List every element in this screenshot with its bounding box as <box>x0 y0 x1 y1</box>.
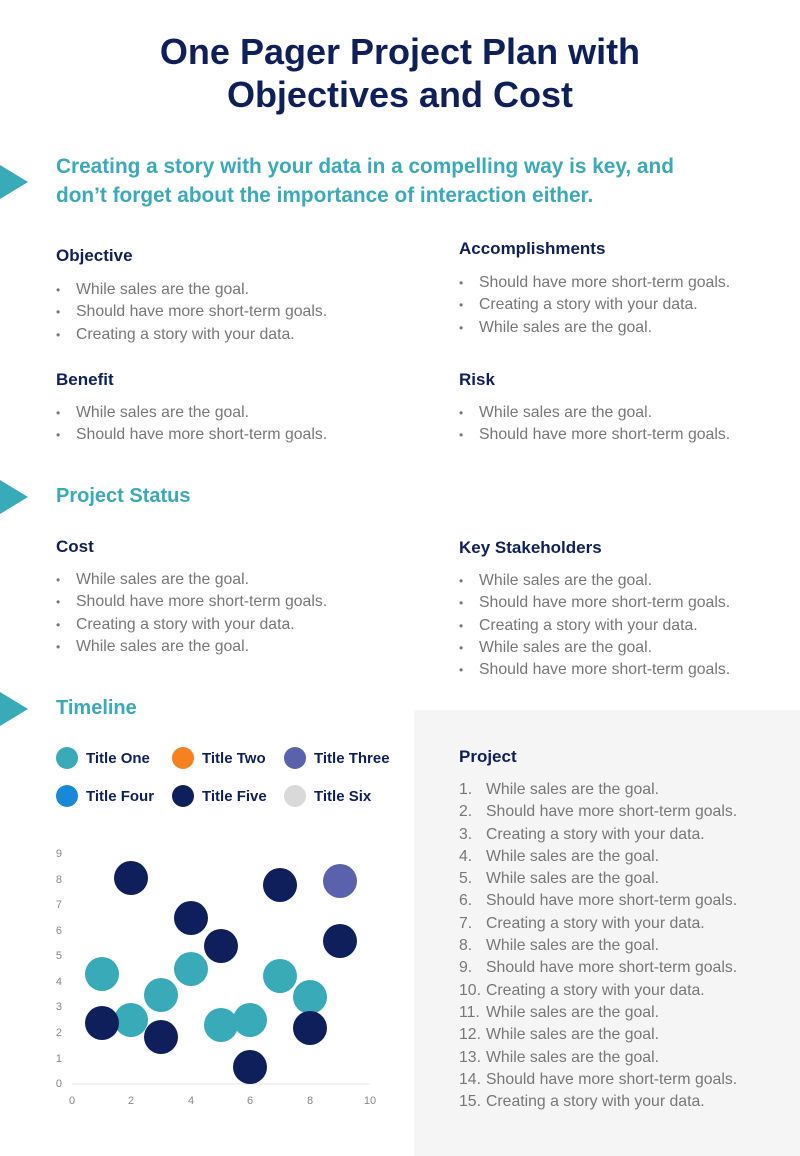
legend: Title Three <box>314 750 390 766</box>
scatter chart: 3 <box>56 1001 62 1013</box>
numbered list: project: 15. <box>459 1093 481 1110</box>
list: cost: While sales are the goal. <box>76 638 249 655</box>
scatter chart: 8 <box>56 874 62 886</box>
scatter chart: 6 <box>56 925 62 937</box>
icon: arrow 3 <box>0 692 28 726</box>
subtitle: don’t forget about the importance of interaction either. <box>56 184 593 207</box>
numbered list: project: Creating a story with your data. <box>486 915 705 932</box>
numbered list: project: 7. <box>459 915 472 932</box>
numbered list: project: 14. <box>459 1071 481 1088</box>
scatter chart: 10 <box>364 1095 376 1107</box>
heading: stakeholders: Key Stakeholders <box>459 538 602 557</box>
list: risk: Should have more short-term goals. <box>479 426 730 443</box>
scatter chart: 2 <box>56 1027 62 1039</box>
scatter chart: 0 <box>56 1078 62 1090</box>
list: risk: While sales are the goal. <box>479 404 652 421</box>
list: benefit <box>56 404 327 443</box>
icon: arrow 2 <box>0 480 28 514</box>
list: risk <box>460 404 730 443</box>
list: stakeholders: Creating a story with your data. <box>479 617 698 634</box>
list: accomplishments: Creating a story with your data. <box>479 296 698 313</box>
list: cost <box>56 571 327 655</box>
list: cost: Creating a story with your data. <box>76 616 295 633</box>
numbered list: project: While sales are the goal. <box>486 1026 659 1043</box>
list: objective <box>56 281 327 343</box>
legend: Title One <box>86 750 150 766</box>
list: stakeholders: Should have more short-term goals. <box>479 661 730 678</box>
numbered list: project: 1. <box>459 781 472 798</box>
numbered list: project: 6. <box>459 892 472 909</box>
numbered list: project: 11. <box>459 1004 480 1021</box>
scatter chart: 7 <box>56 899 62 911</box>
section: project status: Project Status <box>56 485 190 507</box>
heading: benefit: Benefit <box>56 370 114 389</box>
list: objective: Creating a story with your data. <box>76 326 295 343</box>
heading: objective: Objective <box>56 246 133 265</box>
numbered list: project: 2. <box>459 803 472 820</box>
scatter chart: 4 <box>188 1095 194 1107</box>
numbered list: project: While sales are the goal. <box>486 848 659 865</box>
list: cost: Should have more short-term goals. <box>76 593 327 610</box>
numbered list: project: While sales are the goal. <box>486 870 659 887</box>
list: accomplishments: While sales are the goal. <box>479 319 652 336</box>
numbered list: project: Should have more short-term goals. <box>486 892 737 909</box>
numbered list: project: While sales are the goal. <box>486 1049 659 1066</box>
numbered list: project: While sales are the goal. <box>486 937 659 954</box>
list: benefit: While sales are the goal. <box>76 404 249 421</box>
numbered list: project: Creating a story with your data. <box>486 982 705 999</box>
scatter chart: 8 <box>307 1095 313 1107</box>
panel: project <box>414 710 800 1156</box>
list: stakeholders: While sales are the goal. <box>479 639 652 656</box>
numbered list: project: Should have more short-term goals. <box>486 803 737 820</box>
scatter chart: 9 <box>56 848 62 860</box>
numbered list: project: 4. <box>459 848 472 865</box>
numbered list: project: 9. <box>459 959 472 976</box>
subtitle: Creating a story with your data in a compelling way is key, and <box>56 155 674 178</box>
numbered list: project: 3. <box>459 826 472 843</box>
list: objective: Should have more short-term goals. <box>76 303 327 320</box>
list: accomplishments: Should have more short-term goals. <box>479 274 730 291</box>
scatter chart <box>56 848 376 1107</box>
list: stakeholders: Should have more short-term goals. <box>479 594 730 611</box>
list: cost: While sales are the goal. <box>76 571 249 588</box>
section: timeline: Timeline <box>56 697 137 719</box>
list: stakeholders: While sales are the goal. <box>479 572 652 589</box>
heading: project: Project <box>459 747 517 766</box>
numbered list: project: While sales are the goal. <box>486 1004 659 1021</box>
title <box>160 31 640 115</box>
heading: accomplishments: Accomplishments <box>459 239 605 258</box>
numbered list: project: Creating a story with your data. <box>486 826 705 843</box>
heading: cost: Cost <box>56 537 94 556</box>
numbered list: project: Creating a story with your data. <box>486 1093 705 1110</box>
scatter chart: 2 <box>128 1095 134 1107</box>
numbered list: project: 8. <box>459 937 472 954</box>
title: One Pager Project Plan with <box>160 31 640 72</box>
numbered list: project: 10. <box>459 982 481 999</box>
numbered list: project: While sales are the goal. <box>486 781 659 798</box>
title: Objectives and Cost <box>227 74 573 115</box>
legend: Title Five <box>202 788 267 804</box>
numbered list: project <box>459 781 737 1110</box>
numbered list: project: 12. <box>459 1026 481 1043</box>
list: stakeholders <box>460 572 730 678</box>
legend <box>56 747 390 807</box>
list: accomplishments <box>460 274 730 336</box>
icon: arrow 1 <box>0 165 28 199</box>
legend: Title Four <box>86 788 154 804</box>
heading: risk: Risk <box>459 370 495 389</box>
scatter chart: 0 <box>69 1095 75 1107</box>
numbered list: project: Should have more short-term goals. <box>486 959 737 976</box>
subtitle <box>56 155 674 207</box>
scatter chart: 4 <box>56 976 62 988</box>
numbered list: project: 5. <box>459 870 472 887</box>
scatter chart: 1 <box>56 1053 62 1065</box>
list: benefit: Should have more short-term goals. <box>76 426 327 443</box>
list: objective: While sales are the goal. <box>76 281 249 298</box>
numbered list: project: 13. <box>459 1049 481 1066</box>
numbered list: project: Should have more short-term goals. <box>486 1071 737 1088</box>
legend: Title Two <box>202 750 266 766</box>
scatter chart: 6 <box>247 1095 253 1107</box>
legend: Title Six <box>314 788 371 804</box>
scatter chart: 5 <box>56 950 62 962</box>
